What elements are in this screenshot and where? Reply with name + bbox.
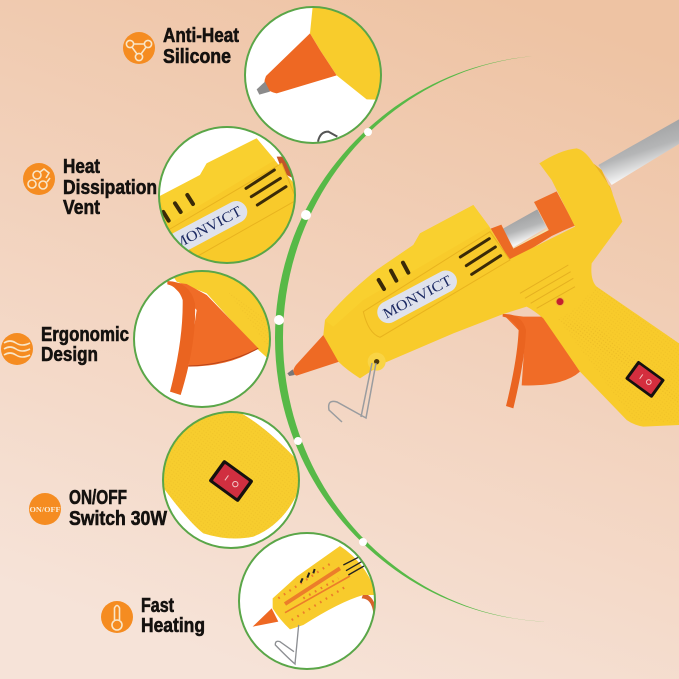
panel: ergonomic design [134, 267, 277, 407]
power switch [625, 360, 665, 398]
main glue gun [287, 119, 679, 427]
panel: heat dissipation vent: MONVICT [171, 204, 245, 253]
brand badge [373, 267, 461, 327]
feature: heat dissipation vent: Heat [63, 156, 100, 178]
feature: ergonomic design: Design [41, 344, 98, 366]
hook hole [368, 353, 386, 371]
panel: heat dissipation vent [157, 127, 300, 267]
feature: on/off switch: Switch 30W [69, 508, 167, 530]
panel: anti-heat silicone [245, 7, 387, 143]
icon: thermometer [101, 601, 133, 633]
vent slots [379, 239, 501, 289]
glue gun body [323, 148, 679, 427]
icon: on/off: ON/OFF [30, 505, 61, 514]
wire hook [329, 363, 376, 422]
brand badge: MONVICT [381, 273, 455, 322]
feature: heat dissipation vent: Dissipation [63, 177, 157, 199]
feature: fast heating [101, 595, 205, 637]
icon: waves [1, 333, 33, 365]
green arc with white dots [274, 55, 558, 622]
panel: on/off switch [160, 410, 302, 548]
icon: molecule [123, 32, 155, 64]
feature: on/off switch: ON/OFF [69, 487, 127, 509]
indicator light [556, 298, 564, 306]
feature: heat dissipation vent [23, 156, 157, 219]
glue gun nozzle [293, 335, 339, 376]
feature: anti-heat silicone: Anti-Heat [163, 25, 239, 47]
feature: anti-heat silicone: Silicone [163, 46, 231, 68]
feature: ergonomic design: Ergonomic [41, 324, 129, 346]
feature: on/off switch [29, 487, 167, 530]
feature: ergonomic design [1, 324, 129, 366]
feature: fast heating: Heating [141, 615, 205, 637]
feature: heat dissipation vent: Vent [63, 197, 100, 219]
glue gun trigger [503, 314, 580, 408]
feature: fast heating: Fast [141, 595, 174, 617]
icon: heat pipes [23, 163, 55, 195]
panel: fast heating [239, 533, 377, 669]
feature: anti-heat silicone [123, 25, 239, 68]
